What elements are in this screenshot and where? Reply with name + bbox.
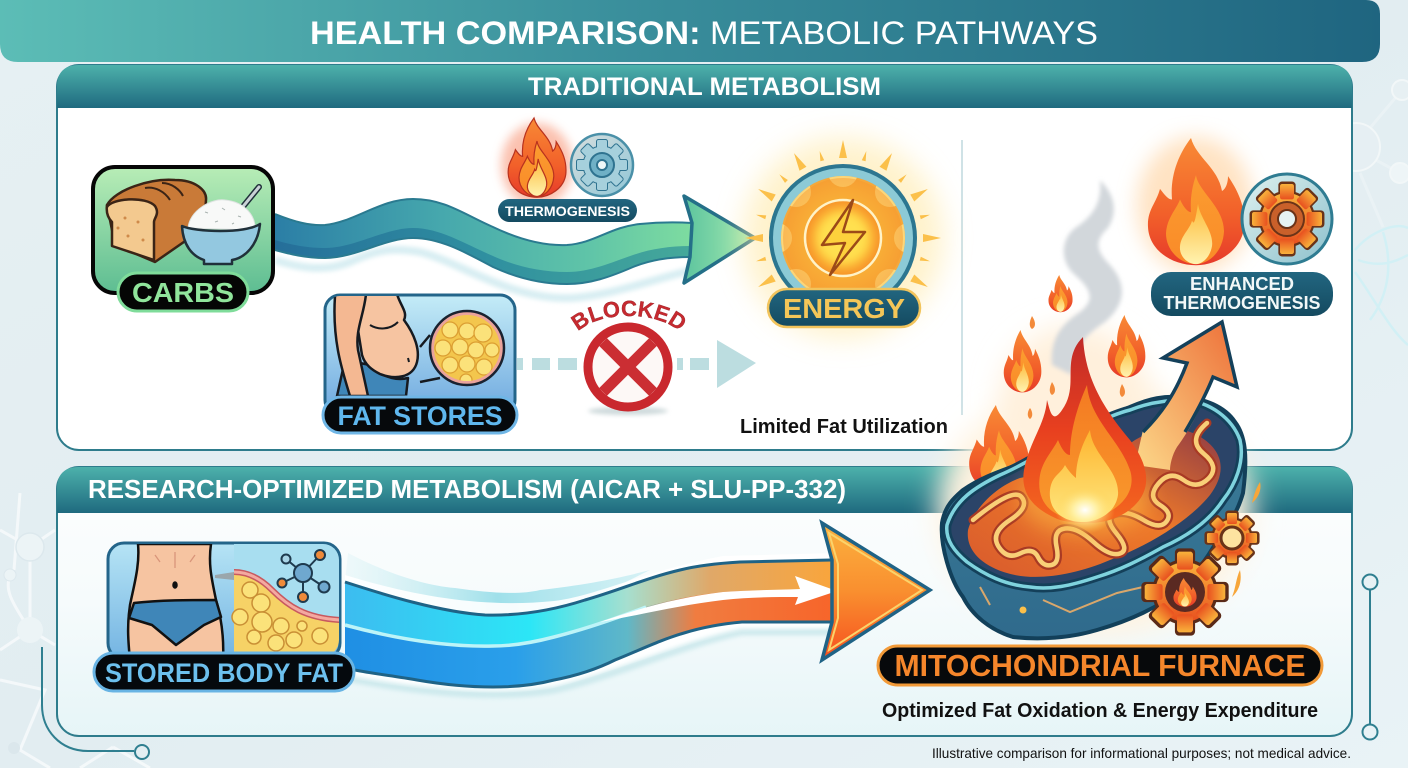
caption: optimized fat oxidation: Optimized Fat Oxidation & Energy Expenditure (882, 700, 1318, 722)
label: enhanced thermogenesis: ENHANCED (1190, 274, 1294, 294)
decorative molecule network: left (0, 493, 150, 768)
panel heading band (57, 65, 1352, 108)
icon: large gear with flame (1143, 550, 1227, 634)
icon: bread (107, 180, 206, 262)
label: carbs: CARBS (132, 277, 234, 308)
panel: research-optimized metabolism (57, 467, 1352, 736)
icon: orange gear badge (1242, 174, 1332, 264)
icon: blocked sign (570, 300, 686, 417)
matrix (968, 429, 1221, 577)
title: HEALTH COMPARISON: METABOLIC PATHWAYS (310, 15, 1098, 51)
card: carbs (93, 167, 273, 311)
arrow: enhanced thermogenesis (1135, 322, 1237, 470)
label: energy (768, 289, 920, 327)
title banner (0, 0, 1380, 62)
divider (961, 140, 963, 415)
footnote: Illustrative comparison for informational purposes; not medical advice. (932, 745, 1351, 761)
icon: gear badge (571, 134, 633, 196)
label: enhanced thermogenesis (1151, 272, 1333, 316)
card: fat stores (323, 294, 517, 433)
panel heading: TRADITIONAL METABOLISM (528, 73, 881, 101)
icon: small gear (1206, 512, 1258, 564)
icon: molecule (278, 550, 330, 602)
decorative circuit line: left (42, 647, 149, 759)
small flames (1004, 275, 1261, 597)
panel heading band (57, 467, 1352, 513)
icon: flame (508, 118, 566, 197)
enhanced thermogenesis group (1148, 138, 1333, 316)
gears on mitochondrion (1143, 512, 1258, 634)
caption: limited fat utilization: Limited Fat Utilization (740, 416, 948, 438)
main flame (1020, 337, 1150, 535)
cristae (973, 423, 1213, 565)
icon: rice bowl (182, 187, 260, 264)
thermogenesis group (498, 118, 637, 222)
illustration: belly (334, 294, 440, 396)
icon: large flame (1148, 138, 1244, 265)
icon: energy sun (743, 138, 943, 338)
icon: mitochondrion furnace (942, 397, 1245, 638)
label: carbs (118, 273, 248, 311)
label: blocked: BLOCKED (570, 300, 686, 330)
bowl cracks and glow dot (980, 587, 1143, 614)
arrow: carbs to energy (275, 196, 755, 298)
label: fat stores: FAT STORES (338, 401, 502, 431)
arrow: stored fat to furnace (345, 523, 930, 694)
decorative molecule network: right (1332, 80, 1408, 345)
panel heading: RESEARCH-OPTIMIZED METABOLISM (AICAR + SLU-PP-332) (88, 474, 846, 504)
outer membrane (942, 397, 1245, 638)
illustration: fat cells (430, 311, 504, 386)
panel: traditional metabolism (57, 65, 1352, 450)
glow behind mitochondrion (937, 137, 1253, 635)
smoke (1052, 180, 1122, 375)
dashed blocked arrow (517, 340, 756, 388)
decorative circuit line: right (1362, 574, 1378, 740)
label: stored body fat: STORED BODY FAT (105, 658, 343, 688)
label: thermogenesis: THERMOGENESIS (505, 204, 630, 219)
left back flame (969, 405, 1029, 491)
label: energy: ENERGY (783, 293, 905, 324)
illustration: torso (128, 544, 223, 660)
card: stored body fat (94, 543, 354, 691)
label: mitochondrial furnace: MITOCHONDRIAL FURNACE (894, 648, 1306, 683)
label: enhanced thermogenesis: THERMOGENESIS (1164, 293, 1320, 313)
inner opening (947, 400, 1241, 588)
illustration: fat tissue (234, 575, 339, 652)
